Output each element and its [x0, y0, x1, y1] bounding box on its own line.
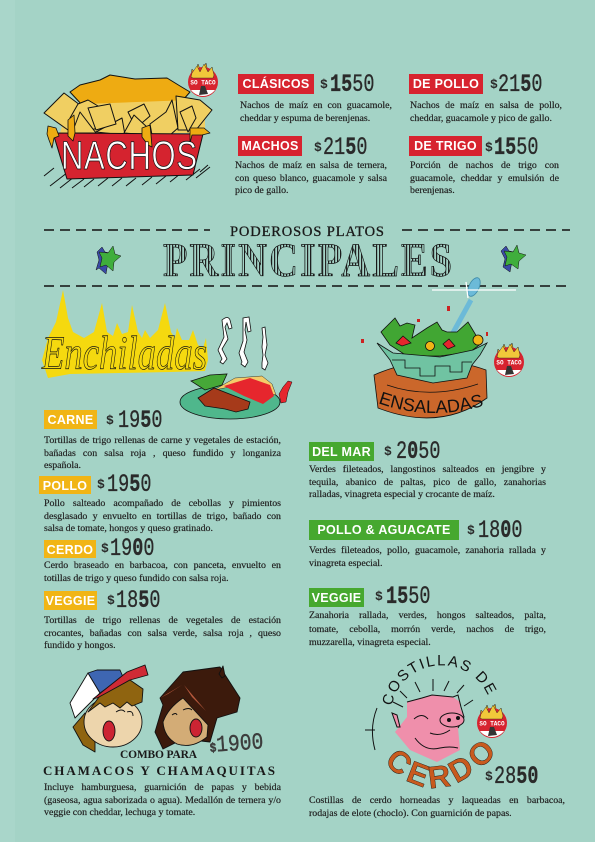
description: Verdes fileteados, langostinos salteados en jengibre y: [309, 464, 546, 475]
description: [240, 100, 392, 124]
heading: chamacos: CHAMACOS Y CHAMAQUITAS: [43, 763, 275, 778]
illustration: enchilada plate: [180, 374, 292, 419]
description: cheddar y espuma de berenjenas.: [240, 113, 370, 124]
menu item: pollo y aguacate: [308, 516, 546, 569]
tag: DEL MAR: [312, 445, 371, 459]
tag: DE TRIGO: [414, 139, 477, 153]
menu item: veggie right: 1550: [386, 582, 430, 611]
illustration: pig: COSTILLAS DE: [382, 655, 497, 704]
description: Nachos de maíz en salsa de pollo,: [410, 100, 562, 111]
flames: [42, 290, 208, 378]
tag: POLLO & AGUACATE: [317, 523, 451, 537]
tag: [309, 588, 364, 607]
description: Cerdo braseado en barbacoa, con panceta, envuelto en: [44, 560, 281, 571]
description: [410, 160, 559, 196]
tag: POLLO: [43, 479, 87, 493]
leaves: [381, 318, 482, 356]
menu item: veggie left: 1850: [116, 586, 160, 615]
description: muzzarella, vinagreta especial.: [309, 637, 431, 648]
tag: DE POLLO: [413, 77, 479, 91]
icon: star left: [96, 246, 121, 274]
price: $: [101, 541, 109, 556]
boy cap: [70, 673, 100, 718]
price: $: [485, 140, 493, 155]
description: Porción de nachos de trigo con: [410, 160, 559, 171]
price: $: [375, 589, 383, 604]
description: Pollo salteado acompañado de cebollas y pimientos: [44, 498, 281, 509]
description: [309, 464, 546, 500]
heading: poderosos platos: PODEROSOS PLATOS: [230, 224, 384, 240]
menu item: clásicos: [238, 70, 392, 124]
description: [44, 498, 281, 534]
menu item: machos: 2150: [323, 133, 367, 162]
icon: badge nachos: [188, 63, 218, 97]
price: $: [490, 77, 498, 92]
costillas description: rodajas de elote (choclo). Con guarnición de papas.: [309, 808, 512, 819]
heading: principales: PRINCIPALES: [163, 235, 452, 287]
description: [44, 435, 281, 471]
menu item: del mar: 2050: [396, 437, 440, 466]
description: salsa de tomate, hongos y queso gratinado.: [44, 523, 213, 534]
tag: CLÁSICOS: [242, 77, 310, 91]
description: crocantes, bañadas con salsa verde, salsa roja , queso: [44, 628, 281, 639]
price: $: [106, 413, 114, 428]
menu item: veggie left: [44, 586, 281, 651]
tray: [53, 133, 203, 179]
cheese drips: [47, 115, 210, 148]
tag: [309, 520, 459, 540]
costillas description: Costillas de cerdo horneadas y laqueadas en barbacoa,: [309, 795, 565, 806]
icon: star right: [501, 245, 526, 272]
tag: VEGGIE: [46, 594, 95, 608]
tag: MACHOS: [241, 139, 299, 153]
description: Verdes fileteados, pollo, guacamole, zanahoria rallada y: [309, 545, 546, 556]
tag: [409, 74, 483, 94]
description: tomate, cebolla, morrón verde, nachos de trigo,: [309, 624, 546, 635]
description: [410, 100, 562, 124]
description: pico de gallo.: [235, 185, 288, 196]
illustration: salad bowl: ENSALADAS: [379, 392, 482, 414]
menu item: pollo y aguacate: 1800: [478, 516, 522, 545]
illustration: pig: [365, 655, 497, 789]
price: $: [320, 77, 328, 92]
description: ralladas, vinagreta especial y crocante de maíz.: [309, 489, 495, 500]
menu item: clásicos: 1550: [330, 70, 374, 99]
description: bañadas con salsa roja , queso fundido y longaniza: [44, 448, 281, 459]
tag: [44, 540, 96, 558]
icon: badge pig: [477, 704, 507, 738]
description: vinagreta especial.: [309, 558, 382, 569]
tag: VEGGIE: [312, 591, 361, 605]
description: [235, 160, 387, 196]
description: berenjenas.: [410, 185, 455, 196]
tag: CARNE: [48, 413, 93, 427]
menu item: pollo: [39, 470, 281, 534]
illustration: nachos tray: [44, 75, 212, 188]
background paper strip: [0, 0, 15, 842]
description: fundido y hongos.: [44, 640, 116, 651]
price: $: [97, 477, 105, 492]
menu item: de pollo: 2150: [498, 70, 542, 99]
price: combo: $1900: [209, 729, 264, 759]
costillas description: [309, 795, 565, 819]
tag: [44, 591, 97, 610]
description: española.: [44, 460, 81, 471]
description: [44, 615, 281, 651]
bowl: [377, 343, 487, 383]
description: tequila, abanico de paltas, pico de gallo, zanahorias: [309, 477, 546, 488]
boy hair: [88, 680, 143, 712]
tag: [238, 136, 302, 156]
description: Zanahoria rallada, verdes, hongos salteados, palta,: [309, 610, 546, 621]
costillas price: $: [485, 769, 493, 784]
tag: [409, 136, 482, 156]
menu item: cerdo: 1900: [110, 534, 154, 563]
description: Nachos de maíz en con guacamole,: [240, 100, 392, 111]
cheese top: [70, 75, 190, 110]
tag: [309, 442, 374, 461]
heading: combo para: COMBO PARA: [120, 749, 198, 761]
boy face: [84, 697, 142, 747]
menu item: de pollo: [409, 70, 562, 124]
tag: [238, 74, 314, 94]
tag: [39, 476, 91, 494]
combo description: (gaseosa, agua saborizada o agua). Medallón de ternera y/o: [44, 795, 281, 806]
girl face: [163, 698, 208, 745]
menu item: veggie right: [309, 582, 546, 648]
description: [309, 610, 546, 648]
illustration: enchiladas flame title: Enchiladas: [41, 327, 207, 380]
tag: [44, 410, 97, 429]
menu item: carne: 1950: [118, 406, 162, 435]
description: Tortillas de trigo rellenas de carne y vegetales de estación,: [44, 435, 281, 446]
menu item: machos: [235, 133, 387, 196]
menu item: de trigo: 1550: [494, 133, 538, 162]
red splashes: [361, 306, 488, 343]
illustration: enchiladas flame title: [41, 290, 208, 380]
price: $: [384, 444, 392, 459]
heading dashes: [44, 230, 570, 286]
base: [374, 361, 487, 418]
menu item: cerdo: [44, 534, 281, 584]
description: Nachos de maíz en salsa de ternera,: [235, 160, 387, 171]
spoon: [449, 300, 471, 340]
nacho chips: [60, 100, 205, 133]
description: [308, 545, 546, 569]
icon: steam: [218, 317, 268, 370]
menu item: de trigo: [409, 133, 559, 196]
illustration: salad bowl: [374, 277, 516, 418]
description: totillas de trigo y queso fundido con salsa roja.: [44, 573, 229, 584]
menu item: carne: [44, 406, 281, 471]
combo description: Incluye hamburguesa, guarnición de papas y bebida: [44, 782, 281, 793]
icon: badge salad: [494, 343, 524, 377]
sparkle: [432, 282, 516, 298]
costillas price: 2850: [494, 762, 538, 791]
description: desglasado y envuelto en tortillas de trigo, bañado con: [44, 511, 281, 522]
price: $: [107, 593, 115, 608]
description: cheddar, guacamole y pico de gallo.: [410, 113, 552, 124]
table shadow hatching: [44, 165, 210, 188]
description: guacamole, cheddar y emulsión de: [410, 173, 559, 184]
combo description: veggie con cheddar, lechuga y tomate.: [44, 807, 195, 818]
tray lettering: NACHOS: [61, 132, 197, 178]
tag: CERDO: [47, 543, 93, 557]
description: [44, 560, 281, 584]
description: Tortillas de trigo rellenas de vegetales de estación: [44, 615, 281, 626]
illustration: pig: CERDO: [388, 742, 493, 789]
illustration: kids: [70, 665, 240, 752]
menu item: pollo: 1950: [107, 470, 151, 499]
description: con queso blanco, guacamole y salsa: [235, 173, 387, 184]
menu item: del mar: [309, 437, 546, 500]
boy back hair: [73, 713, 95, 752]
price: $: [314, 140, 322, 155]
price: $: [467, 523, 475, 538]
combo description: [44, 782, 281, 818]
girl hair: [155, 667, 240, 749]
